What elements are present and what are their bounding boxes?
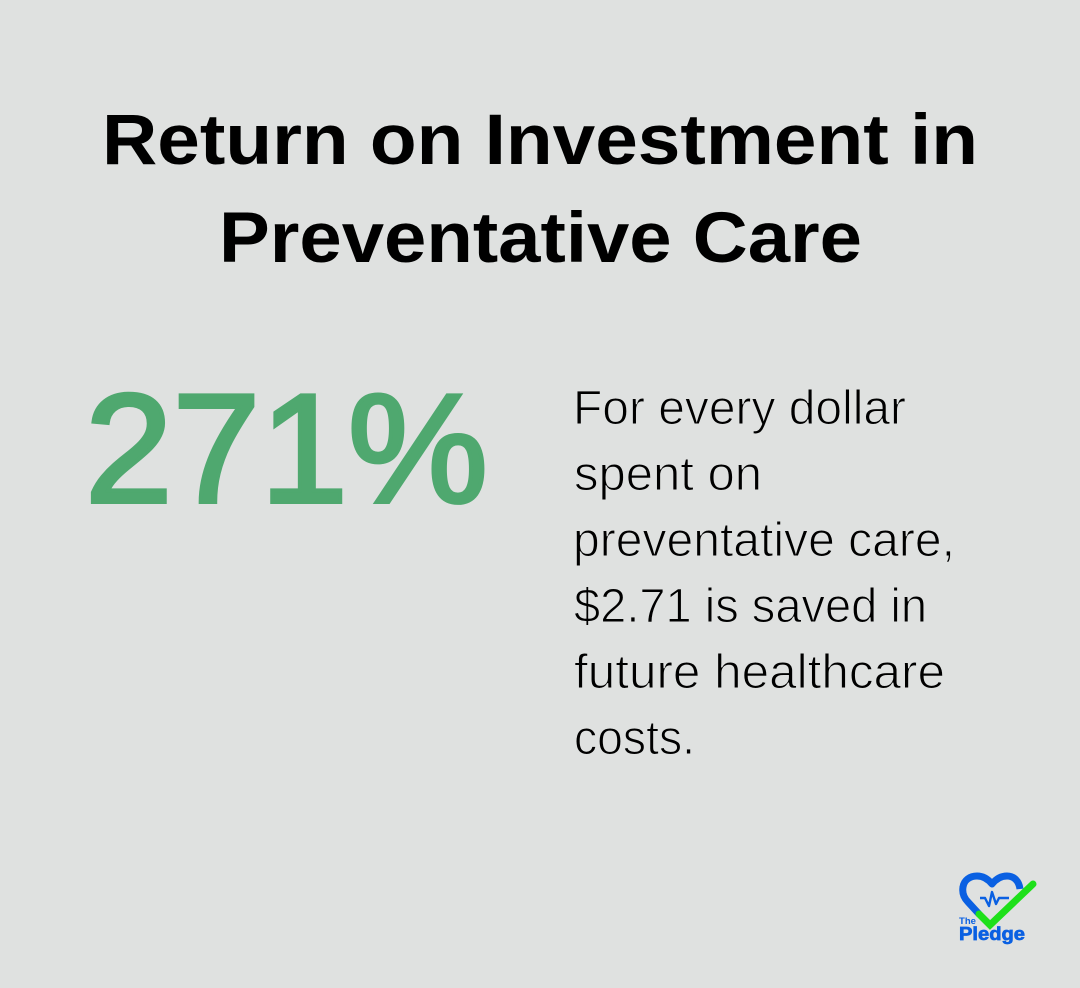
description text: future healthcare: [574, 646, 945, 699]
description text: costs.: [574, 712, 695, 765]
title: Return on Investment in: [102, 101, 978, 180]
statistic: 271%: 271%: [85, 362, 488, 535]
logo text: The: The: [959, 916, 976, 926]
logo text: Pledge: Pledge: [959, 923, 1025, 944]
description text: spent on: [574, 448, 762, 501]
description text: $2.71 is saved in: [574, 580, 927, 633]
icon: heartbeat line: [980, 892, 1009, 906]
description text: [573, 382, 955, 765]
icon: heart outline: [963, 876, 1020, 914]
icon: green check mark: [979, 884, 1033, 925]
description text: preventative care,: [573, 514, 955, 567]
title: [102, 101, 978, 278]
title: Preventative Care: [219, 199, 862, 278]
description text: For every dollar: [573, 382, 906, 435]
logo: The Pledge: [959, 876, 1033, 944]
